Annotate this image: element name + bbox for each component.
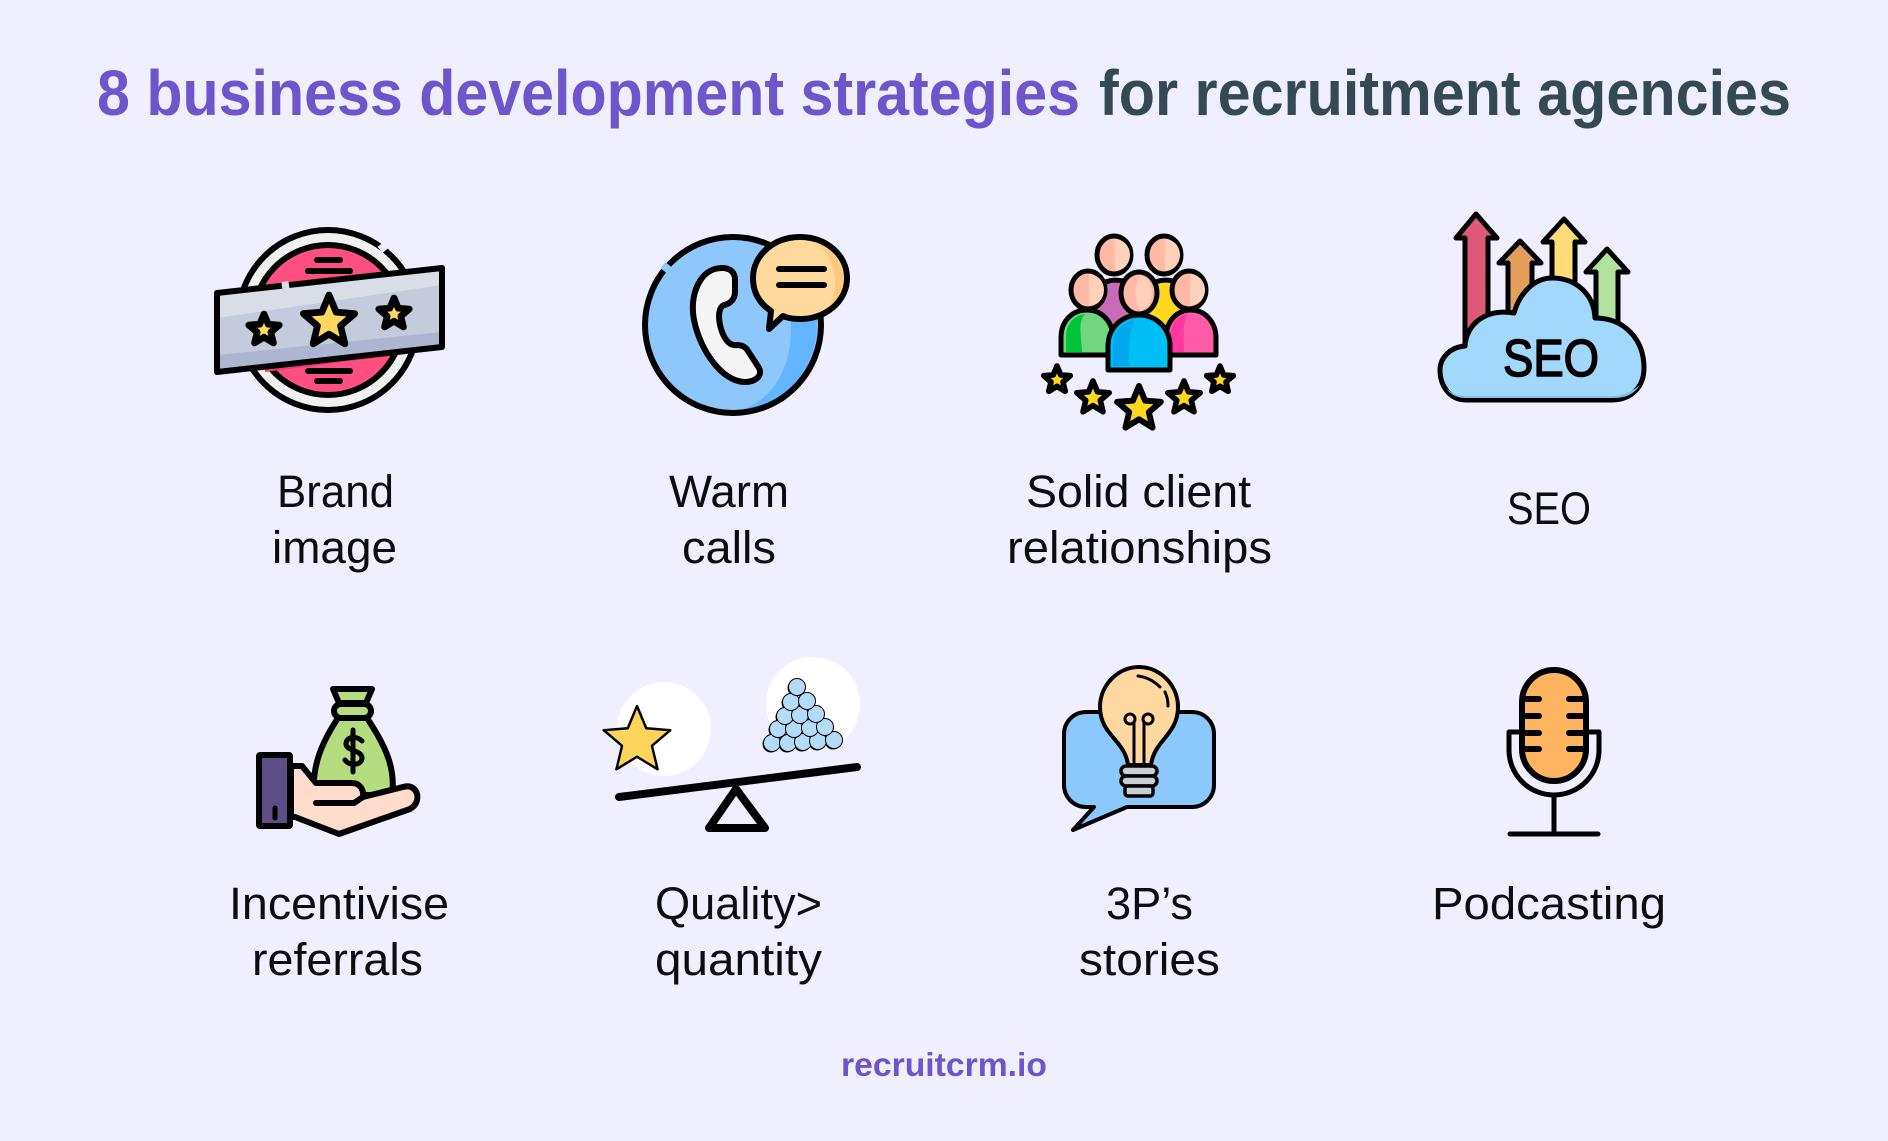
label: Solid client relationships: relationships xyxy=(1007,522,1272,573)
icon: podcast microphone xyxy=(1509,670,1599,834)
icon: hand holding money bag xyxy=(259,689,417,834)
icon: light bulb in speech bubble xyxy=(1064,667,1214,830)
label: Quality> quantity: Quality> xyxy=(655,878,822,929)
label: 3P's stories: 3P’s xyxy=(1106,878,1193,929)
label: Warm calls: calls xyxy=(682,522,776,573)
label: Brand image: Brand xyxy=(277,466,394,517)
label: Incentivise referrals xyxy=(229,878,449,985)
label: Brand image xyxy=(272,466,397,573)
label: Quality> quantity: quantity xyxy=(655,934,823,985)
icon: client group with stars xyxy=(1044,236,1233,428)
icon: SEO cloud with arrows xyxy=(1440,214,1644,400)
label: Warm calls xyxy=(669,466,789,573)
title: 8 business development strategies xyxy=(97,57,1080,129)
label: Solid client relationships: Solid client xyxy=(1026,466,1252,517)
label: 3P's stories xyxy=(1079,878,1220,985)
label: Incentivise referrals: Incentivise xyxy=(229,878,449,929)
icon: warm call phone xyxy=(645,237,847,413)
label: SEO: SEO xyxy=(1507,483,1591,534)
icon: SEO cloud with arrows: SEO xyxy=(1503,330,1599,388)
label: Incentivise referrals: referrals xyxy=(252,934,423,985)
label: Warm calls: Warm xyxy=(669,466,789,517)
label: Solid client relationships xyxy=(1007,466,1272,573)
title xyxy=(97,57,1791,129)
label: Quality> quantity xyxy=(655,878,823,985)
icon: brand image badge xyxy=(217,230,442,410)
icon: quality over quantity seesaw xyxy=(604,657,860,828)
label: 3P's stories: stories xyxy=(1079,934,1220,985)
title: for recruitment agencies xyxy=(1099,57,1791,129)
label: Podcasting: Podcasting xyxy=(1432,878,1666,929)
label: Brand image: image xyxy=(272,522,397,573)
footer: website: recruitcrm.io xyxy=(841,1046,1047,1083)
